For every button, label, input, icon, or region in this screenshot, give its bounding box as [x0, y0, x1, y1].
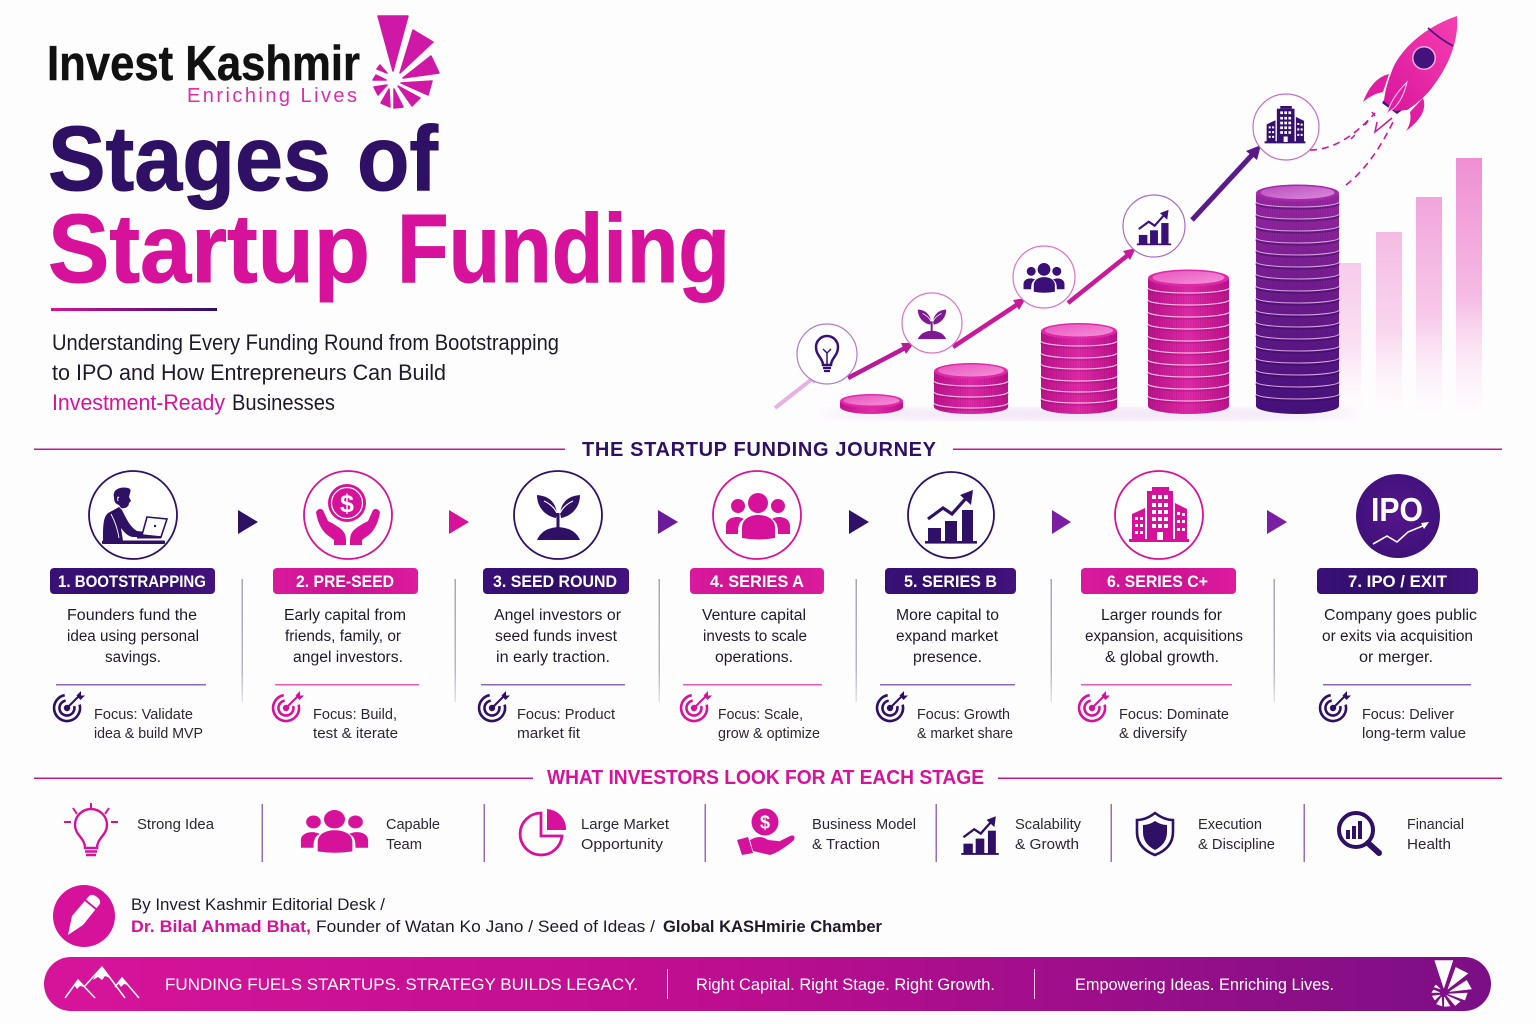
title: of: [357, 108, 438, 210]
panel: stage 1 bootstrapping: [50, 471, 215, 742]
icon: team: [301, 810, 368, 853]
icon: buildings: [1115, 471, 1203, 559]
focus text: test & iterate: [313, 726, 398, 742]
icon: chart: [961, 816, 999, 855]
focus text: market fit: [517, 726, 580, 742]
criterion: execution: [1137, 813, 1275, 855]
description: angel investors.: [293, 649, 403, 666]
description: in early traction.: [496, 649, 610, 666]
coin stack 4: [1148, 270, 1229, 414]
panel: stage 7 ipo / exit: [1317, 474, 1478, 742]
title: Stages: [48, 108, 331, 210]
icon: lightbulb: [64, 803, 118, 855]
label: series b: [885, 568, 1016, 594]
rocket trail: [1310, 113, 1393, 185]
focus text: grow & optimize: [718, 726, 820, 742]
byline: By Invest Kashmir Editorial Desk /: [131, 895, 385, 914]
criterion: financial health: Health: [1407, 836, 1451, 853]
focus text: [1362, 707, 1466, 742]
icon: founder at laptop: [89, 471, 177, 559]
description: [494, 607, 621, 666]
milestone: team: [1013, 246, 1075, 308]
byline: Dr. Bilal Ahmad Bhat,: [131, 917, 311, 936]
byline: [131, 895, 882, 936]
background bars: [1339, 158, 1482, 413]
icon: team: [713, 471, 801, 559]
description: Angel investors or: [494, 607, 621, 624]
criterion: execution: & Discipline: [1198, 836, 1275, 853]
focus text: Focus: Product: [517, 707, 615, 723]
focus text: Focus: Dominate: [1119, 707, 1229, 723]
footer banner: Right Capital. Right Stage. Right Growth.: [696, 975, 995, 994]
coin stack 2: [934, 363, 1008, 414]
description: Venture capital: [702, 607, 806, 624]
milestone: growth chart: [1123, 195, 1185, 257]
label: series b: 5. SERIES B: [904, 573, 997, 591]
criterion: large market: [520, 809, 670, 855]
criterion: scalability: Scalability: [1015, 816, 1081, 833]
logo wordmark: Enriching Lives: [187, 85, 357, 107]
description: [1322, 607, 1477, 666]
panel: stage 6 series c+: [1079, 471, 1243, 742]
icon: hands holding coin: $: [340, 490, 354, 518]
icon: hand with coin: [737, 808, 794, 855]
growth arrows: [775, 145, 1261, 408]
panel: stage 3 seed round: [479, 471, 629, 742]
criterion: strong idea: [64, 803, 215, 855]
description: [67, 607, 199, 666]
criterion: business model: Business Model: [812, 816, 916, 833]
criterion: large market: Opportunity: [581, 836, 664, 853]
description: or exits via acquisition: [1322, 628, 1473, 645]
description: invests to scale: [703, 628, 807, 645]
footer banner: Empowering Ideas. Enriching Lives.: [1075, 975, 1334, 994]
label: ipo / exit: 7. IPO / EXIT: [1348, 573, 1447, 591]
label: series a: [690, 568, 824, 594]
criterion: large market: Large Market: [581, 816, 670, 833]
description: More capital to: [896, 607, 999, 624]
panel: stage 4 series a: [681, 471, 824, 742]
stage separators: [242, 579, 1275, 702]
investor criteria row: [64, 803, 1464, 862]
title: [48, 108, 730, 303]
subtitle: to IPO and How Entrepreneurs Can Build: [52, 360, 446, 385]
milestone: idea: [797, 324, 857, 384]
label: bootstrapping: [50, 568, 215, 594]
coin stack 5: [1256, 184, 1339, 414]
description: seed funds invest: [495, 628, 618, 645]
criterion: financial health: Financial: [1407, 816, 1464, 833]
coin stack 1: [840, 394, 903, 414]
description: [896, 607, 999, 666]
focus text: & diversify: [1119, 726, 1188, 742]
icon: ipo badge: IPO: [1371, 491, 1423, 528]
icon: pencil: [53, 885, 115, 947]
icon: rocket: [1351, 16, 1457, 139]
icon: hands holding coin: [304, 471, 392, 559]
label: seed round: [483, 568, 629, 594]
focus text: Focus: Deliver: [1362, 707, 1454, 723]
focus text: Focus: Scale,: [718, 707, 803, 723]
icon: magnifier: [1339, 813, 1379, 853]
criterion: execution: Execution: [1198, 816, 1262, 833]
icon: growth chart: [908, 472, 994, 558]
byline: Founder of Watan Ko Jano / Seed of Ideas /: [316, 917, 655, 936]
subtitle: Businesses: [232, 390, 335, 415]
focus text: idea & build MVP: [94, 726, 203, 742]
section heading: what investors look for: WHAT INVESTORS LOOK FOR AT EACH STAGE: [547, 767, 984, 789]
panel: stage 5 series b: [877, 472, 1016, 742]
subtitle: [52, 330, 559, 415]
criterion: business model: & Traction: [812, 836, 880, 853]
description: friends, family, or: [285, 628, 401, 645]
milestone: buildings: [1253, 94, 1319, 160]
description: Company goes public: [1324, 607, 1477, 624]
icon: target: [1320, 691, 1351, 721]
hero chart: growth stacks and rocket: [775, 16, 1482, 420]
title: Startup: [48, 194, 370, 303]
description: operations.: [715, 649, 793, 666]
label: seed round: 3. SEED ROUND: [493, 573, 617, 591]
icon: target: [479, 691, 510, 721]
criterion: scalability: [961, 816, 1081, 855]
section heading: the startup funding journey: THE STARTUP FUNDING JOURNEY: [582, 439, 937, 461]
header: logo, title, subtitle: [47, 16, 730, 415]
subtitle: Investment-Ready: [52, 390, 225, 415]
description: [284, 607, 406, 666]
label: bootstrapping: 1. BOOTSTRAPPING: [58, 573, 206, 591]
icon: target: [54, 691, 85, 721]
label: series c+: 6. SERIES C+: [1107, 573, 1208, 591]
icon: hand with coin: $: [760, 812, 770, 832]
logo wordmark: Invest Kashmir: [47, 37, 360, 91]
description: Founders fund the: [67, 607, 197, 624]
focus text: Focus: Build,: [313, 707, 397, 723]
criterion: financial health: [1339, 813, 1464, 853]
description: savings.: [105, 649, 161, 666]
criterion: capable team: Capable: [386, 816, 440, 833]
title: Funding: [397, 194, 730, 303]
label: pre-seed: 2. PRE-SEED: [296, 573, 394, 591]
description: [1085, 607, 1243, 666]
icon: sprout: [514, 471, 602, 559]
icon: footer logo: [1432, 960, 1471, 1006]
focus text: [94, 707, 203, 742]
icon: mountains: [65, 967, 139, 998]
description: & global growth.: [1105, 649, 1219, 666]
icon: target: [1079, 691, 1110, 721]
footer banner: FUNDING FUELS STARTUPS. STRATEGY BUILDS LEGACY.: [165, 975, 638, 994]
label: series a: 4. SERIES A: [710, 573, 804, 591]
focus text: Focus: Growth: [917, 707, 1010, 723]
icon: target: [877, 691, 908, 721]
criterion: capable team: Team: [386, 836, 422, 853]
footer banner: [44, 957, 1491, 1011]
icon: target: [681, 691, 712, 721]
description: Larger rounds for: [1101, 607, 1222, 624]
description: presence.: [913, 649, 982, 666]
criterion: strong idea: Strong Idea: [137, 816, 215, 833]
icon: ipo badge: [1356, 474, 1440, 558]
focus text: [517, 707, 615, 742]
panel: stage 2 pre-seed: [273, 471, 419, 742]
label: pre-seed: [273, 568, 418, 594]
subtitle: Understanding Every Funding Round from Bootstrapping: [52, 330, 559, 355]
icon: logo sunburst: [373, 16, 439, 108]
focus text: & market share: [917, 726, 1013, 742]
focus text: [718, 707, 820, 742]
focus text: Focus: Validate: [94, 707, 193, 723]
byline: Global KASHmirie Chamber: [663, 917, 882, 936]
criterion: business model: [737, 808, 916, 855]
criterion: capable team: [301, 810, 440, 853]
description: expand market: [896, 628, 999, 645]
description: Early capital from: [284, 607, 406, 624]
icon: shield: [1137, 813, 1173, 855]
description: expansion, acquisitions: [1085, 628, 1243, 645]
focus text: [313, 707, 398, 742]
icon: pie chart: [520, 809, 566, 855]
label: ipo / exit: [1317, 568, 1478, 594]
focus text: long-term value: [1362, 726, 1466, 742]
label: series c+: [1081, 568, 1236, 594]
focus text: [1119, 707, 1229, 742]
milestone: sprout: [902, 293, 962, 353]
coin stack 3: [1041, 323, 1117, 414]
icon: target: [273, 691, 304, 721]
description: or merger.: [1359, 649, 1433, 666]
stage arrows: [238, 510, 1287, 534]
focus text: [917, 707, 1013, 742]
description: idea using personal: [67, 628, 199, 645]
criterion: scalability: & Growth: [1015, 836, 1079, 853]
description: [702, 607, 807, 666]
author credit: [53, 885, 882, 947]
